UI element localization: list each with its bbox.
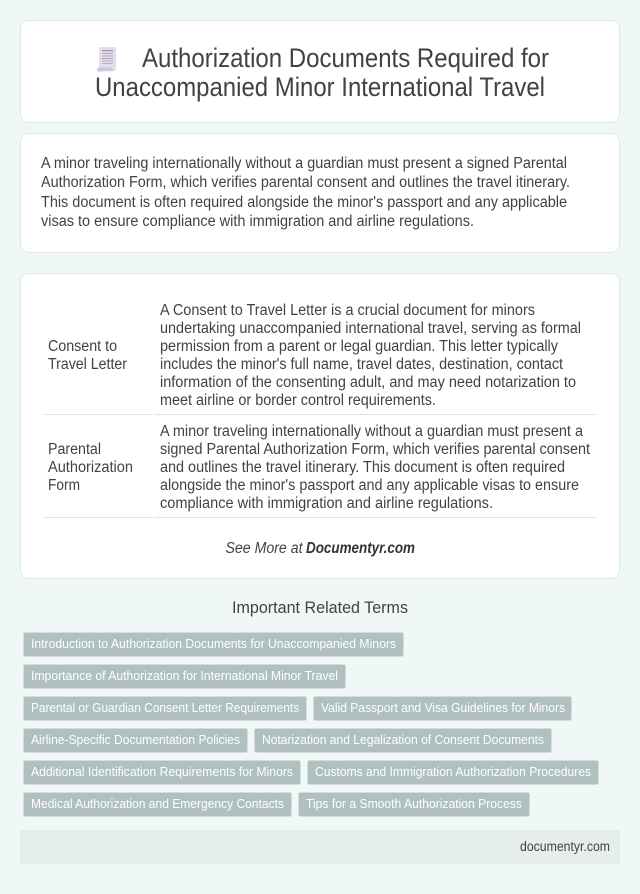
title text: Unaccompanied Minor International Travel [95, 72, 545, 102]
row: Consent to Travel Letter: Travel Letter [48, 356, 127, 373]
tag: Parental or Guardian Consent Letter Requirements [31, 700, 299, 715]
tag [308, 760, 598, 784]
intro text: Authorization Form, which verifies parental consent and outlines the travel itinerary. [41, 174, 570, 191]
footer [20, 830, 620, 864]
related terms tags [24, 632, 598, 816]
row: Consent to Travel Letter: includes the minor's full name, travel dates, destination, contact [160, 356, 564, 373]
tag [24, 792, 292, 816]
tag: Medical Authorization and Emergency Contacts [31, 796, 284, 811]
tag [24, 760, 300, 784]
intro text: This document is often required alongside the minor's passport and any applicable [41, 194, 567, 211]
tag [24, 696, 306, 720]
panel: introduction [20, 134, 620, 252]
intro text [41, 155, 570, 230]
row: Parental Authorization Form: and outlines the travel itinerary. This document is often required [160, 459, 565, 476]
row: Consent to Travel Letter: Consent to [48, 338, 117, 355]
see more link [226, 540, 415, 557]
row: Parental Authorization Form: signed Parental Authorization Form, which verifies parental consent [160, 441, 591, 458]
title text: Authorization Documents Required for [142, 43, 549, 73]
heading: Important Related Terms: Important Related Terms [232, 599, 408, 617]
tag [254, 728, 552, 752]
tag: Customs and Immigration Authorization Procedures [315, 764, 591, 779]
see more link: Documentyr.com [306, 540, 415, 557]
tag: Introduction to Authorization Documents for Unaccompanied Minors [31, 636, 396, 651]
row: Parental Authorization Form: Authorization [48, 459, 133, 476]
see more link: See More at [226, 540, 303, 557]
tag: Notarization and Legalization of Consent Documents [262, 732, 544, 747]
tag [24, 728, 248, 752]
tag: Valid Passport and Visa Guidelines for Minors [321, 700, 565, 715]
icon: document scroll [97, 47, 116, 72]
tag: Additional Identification Requirements for Minors [31, 764, 293, 779]
row: Parental Authorization Form: alongside the minor's passport and any applicable visas to ensure [160, 477, 579, 494]
panel: document table [20, 274, 620, 578]
tag [24, 664, 346, 688]
row: Parental Authorization Form: A minor traveling internationally without a guardian must present a [160, 423, 583, 440]
title text [95, 43, 549, 102]
row: Consent to Travel Letter: permission from a parent or legal guardian. This letter typically [160, 338, 558, 355]
row: Parental Authorization Form: compliance with immigration and airline regulations. [160, 495, 493, 512]
intro text: A minor traveling internationally without a guardian must present a signed Parental [41, 155, 567, 172]
row: Parental Authorization Form [43, 423, 597, 518]
footer: documentyr.com [520, 839, 610, 854]
panel: title [20, 20, 620, 122]
row: Consent to Travel Letter: meet airline or border control requirements. [160, 392, 436, 409]
row: Consent to Travel Letter: undertaking unaccompanied international travel, serving as formal [160, 320, 581, 337]
intro text: visas to ensure compliance with immigration and airline regulations. [41, 213, 474, 230]
row: Consent to Travel Letter: A Consent to Travel Letter is a crucial document for minors [160, 302, 535, 319]
row: Parental Authorization Form: Parental [48, 441, 101, 458]
row: Parental Authorization Form: Form [48, 477, 80, 494]
tag [24, 632, 404, 656]
row: Consent to Travel Letter: information of the consenting adult, and may need notarization to [160, 374, 576, 391]
tag: Airline-Specific Documentation Policies [31, 732, 240, 747]
tag: Tips for a Smooth Authorization Process [306, 796, 522, 811]
tag [314, 696, 572, 720]
tag [298, 792, 530, 816]
row: Consent to Travel Letter [43, 302, 597, 415]
tag: Importance of Authorization for International Minor Travel [31, 668, 338, 683]
